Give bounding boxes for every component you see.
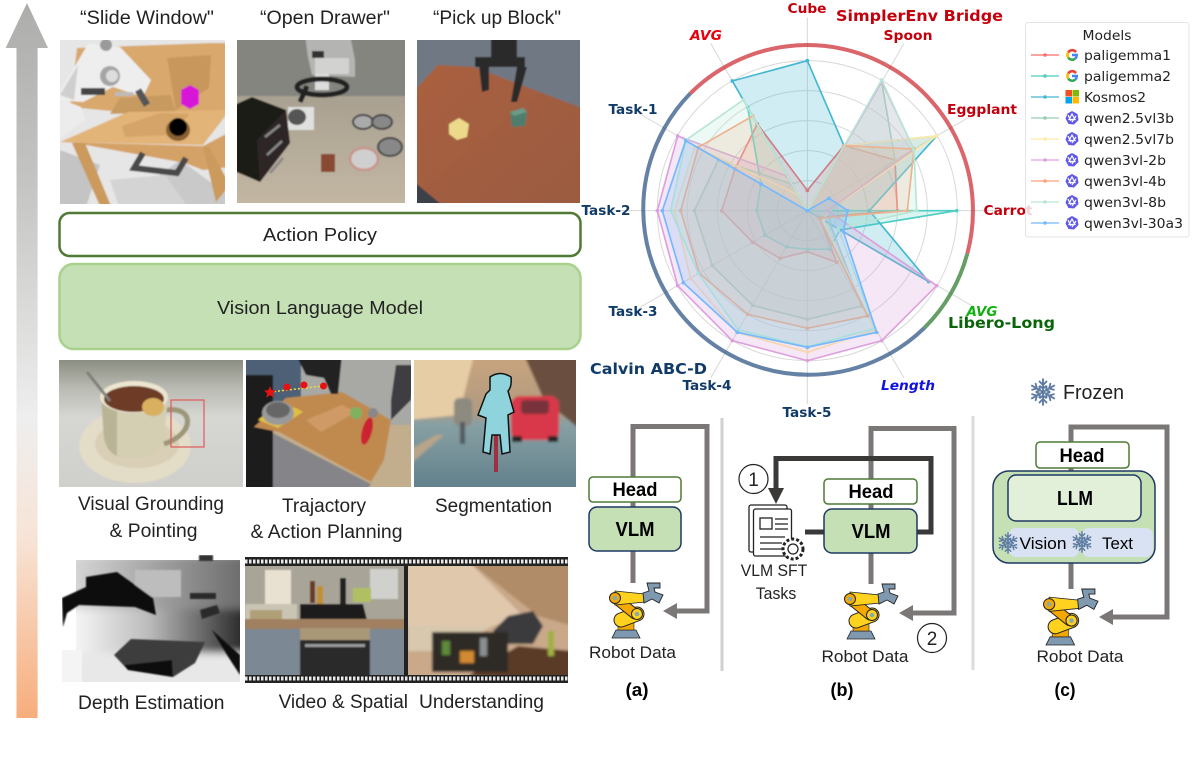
LLM box: LLM xyxy=(1057,488,1093,510)
text encoder: Text xyxy=(1102,534,1133,553)
panel: vision language model xyxy=(60,264,580,349)
text encoder xyxy=(1072,528,1153,557)
diagram (b): VLM with SFT tasks xyxy=(739,428,954,700)
task caption: Pick up Block: “Pick up Block" xyxy=(433,8,561,29)
label: Robot Data (b): Robot Data xyxy=(822,647,909,666)
radar axis labels: Calvin ABC-D xyxy=(590,360,707,378)
ring: Calvin ABC-D arc xyxy=(643,94,924,375)
label: (c): (c) xyxy=(1054,680,1076,700)
label: Frozen: Frozen xyxy=(1063,382,1124,404)
label: VLM SFT Tasks: VLM SFT xyxy=(741,561,807,580)
legend row: qwen3vl-30a3 xyxy=(1031,216,1183,232)
divider lines xyxy=(722,416,973,671)
legend row: paligemma2: paligemma2 xyxy=(1084,70,1171,85)
series: qwen3vl-4b xyxy=(681,116,914,328)
legend row: qwen3vl-4b: qwen3vl-4b xyxy=(1084,175,1166,190)
panel: action policy: Action Policy xyxy=(263,225,377,245)
image: tea cup with red bounding box xyxy=(59,360,243,487)
callout: step 2 xyxy=(918,624,946,652)
label: VLM SFT Tasks xyxy=(741,561,807,603)
caption: video and spatial understanding: Video & Spatial xyxy=(279,692,408,713)
callout: step 2: 2 xyxy=(927,629,937,650)
label: (b): (b) xyxy=(830,680,854,700)
arrow: robot data loop (b) xyxy=(871,428,954,621)
icon: Frozen legend snowflake xyxy=(1030,379,1056,405)
caption: video and spatial understanding xyxy=(279,692,544,713)
head box (a) xyxy=(589,477,681,502)
label: (a): (a) xyxy=(626,680,649,700)
radar axis labels: Task-1 xyxy=(608,103,658,118)
head box (b) xyxy=(824,479,917,504)
legend row: qwen3vl-30a3: qwen3vl-30a3 xyxy=(1084,217,1183,232)
radar chart xyxy=(614,17,1001,404)
arrow: robot data loop (c) xyxy=(1071,427,1167,625)
panel: frozen VLM xyxy=(993,471,1155,563)
film frame: kitchen xyxy=(245,566,404,675)
series: paligemma2 xyxy=(748,107,957,249)
radar axis labels: AVG xyxy=(965,305,998,320)
caption: segmentation: Segmentation xyxy=(435,496,552,517)
image: kitchen table with drawer xyxy=(237,40,405,203)
legend: models xyxy=(1026,22,1189,237)
caption: trajectory and action planning xyxy=(250,496,402,543)
caption: trajectory and action planning: & Action Planning xyxy=(250,522,402,543)
icon: robot arm (b) xyxy=(844,584,898,639)
radar axis labels: Cube xyxy=(788,2,827,17)
radar axis labels xyxy=(582,2,1055,421)
VLM box (b) xyxy=(824,509,917,553)
VLM box (b): VLM xyxy=(852,521,890,543)
radar axis labels: Task-3 xyxy=(608,305,658,320)
image: depth map xyxy=(62,555,240,682)
legend row: qwen2.5vl7b xyxy=(1031,132,1174,148)
series: qwen2.5vl3b xyxy=(694,82,895,319)
label: Robot Data (a): Robot Data xyxy=(589,643,677,662)
panel: action policy xyxy=(60,213,580,256)
legend row: paligemma2 xyxy=(1031,70,1171,85)
series: qwen2.5vl7b xyxy=(674,136,937,352)
radar axis labels: Length xyxy=(881,379,935,394)
image: cyclist segmentation xyxy=(414,360,576,487)
icon: document with gear xyxy=(749,505,803,559)
diagram (c): frozen LLM xyxy=(993,427,1167,700)
legend row: qwen2.5vl7b: qwen2.5vl7b xyxy=(1084,133,1174,148)
callout: step 1: 1 xyxy=(748,470,759,491)
icon: robot arm (a) xyxy=(610,583,663,638)
radar axis labels: Task-2 xyxy=(582,204,630,219)
vision encoder: Vision xyxy=(1020,534,1066,553)
series: qwen3vl-8b xyxy=(671,80,917,347)
legend row: qwen3vl-8b: qwen3vl-8b xyxy=(1084,196,1166,211)
radar axis labels: Task-5 xyxy=(782,406,832,421)
film frame: attic room xyxy=(408,566,568,675)
caption: depth estimation: Depth Estimation xyxy=(78,693,224,714)
image: video filmstrip xyxy=(245,557,568,683)
radar axis labels: AVG xyxy=(689,29,722,44)
series: Kosmos2 xyxy=(732,61,937,282)
radar axis labels: Eggplant xyxy=(947,103,1017,118)
head box (a): Head xyxy=(612,480,658,501)
upward gradient arrow xyxy=(6,3,48,718)
radar axis labels: Spoon xyxy=(884,29,932,44)
legend row: Kosmos2 xyxy=(1031,90,1146,106)
arrow: SFT task loop (b) xyxy=(768,458,931,532)
ring: SimplerEnv Bridge arc xyxy=(690,45,973,254)
series: qwen3vl-30a3 xyxy=(662,141,877,347)
legend row: paligemma1 xyxy=(1031,49,1171,64)
vision encoder xyxy=(998,528,1079,557)
icon: robot arm (c) xyxy=(1044,589,1098,645)
image: gripper above blocks on table xyxy=(417,40,580,203)
caption: visual grounding and pointing xyxy=(78,494,224,542)
image: trajectory planning scene xyxy=(246,360,411,487)
legend row: qwen2.5vl3b xyxy=(1031,111,1174,127)
caption: trajectory and action planning: Trajactory xyxy=(282,496,366,517)
label: VLM SFT Tasks: Tasks xyxy=(756,584,796,603)
legend: models: Models xyxy=(1082,29,1132,44)
series: qwen3vl-2b xyxy=(657,82,937,361)
callout: step 1 xyxy=(739,464,768,494)
VLM box (a) xyxy=(589,507,681,551)
legend row: qwen3vl-2b xyxy=(1031,153,1166,169)
task caption: Open Drawer: “Open Drawer" xyxy=(260,8,390,29)
diagram (a): VLM with head xyxy=(589,426,707,700)
caption: visual grounding and pointing: Visual Grounding xyxy=(78,494,224,515)
series: paligemma1 xyxy=(722,124,897,262)
radar axis labels: SimplerEnv Bridge xyxy=(836,7,1003,25)
caption: video and spatial understanding: Understanding xyxy=(419,692,544,713)
ring: Libero-Long arc xyxy=(924,254,967,328)
radar axis labels: Task-4 xyxy=(682,379,732,394)
legend row: qwen2.5vl3b: qwen2.5vl3b xyxy=(1084,112,1174,127)
panel: vision language model: Vision Language Model xyxy=(217,298,423,318)
image: simulated desk with robot arm xyxy=(60,40,225,204)
caption: visual grounding and pointing: & Pointing xyxy=(110,521,198,542)
head box (c): Head xyxy=(1060,446,1104,467)
radar axis labels: Libero-Long xyxy=(948,314,1055,332)
legend row: Kosmos2: Kosmos2 xyxy=(1084,91,1146,106)
legend row: paligemma1: paligemma1 xyxy=(1084,49,1171,64)
legend row: qwen3vl-2b: qwen3vl-2b xyxy=(1084,154,1166,169)
LLM box xyxy=(1008,475,1141,521)
label: Robot Data (c): Robot Data xyxy=(1036,647,1124,666)
head box (c) xyxy=(1036,442,1129,468)
legend row: qwen3vl-4b xyxy=(1031,174,1166,190)
task caption: Slide Window: “Slide Window" xyxy=(80,8,214,29)
head box (b): Head xyxy=(848,482,894,503)
radar axis labels: Carrot xyxy=(984,204,1032,219)
VLM box (a): VLM xyxy=(616,519,654,541)
arrow: robot data loop (a) xyxy=(633,426,707,619)
legend row: qwen3vl-8b xyxy=(1031,195,1166,211)
